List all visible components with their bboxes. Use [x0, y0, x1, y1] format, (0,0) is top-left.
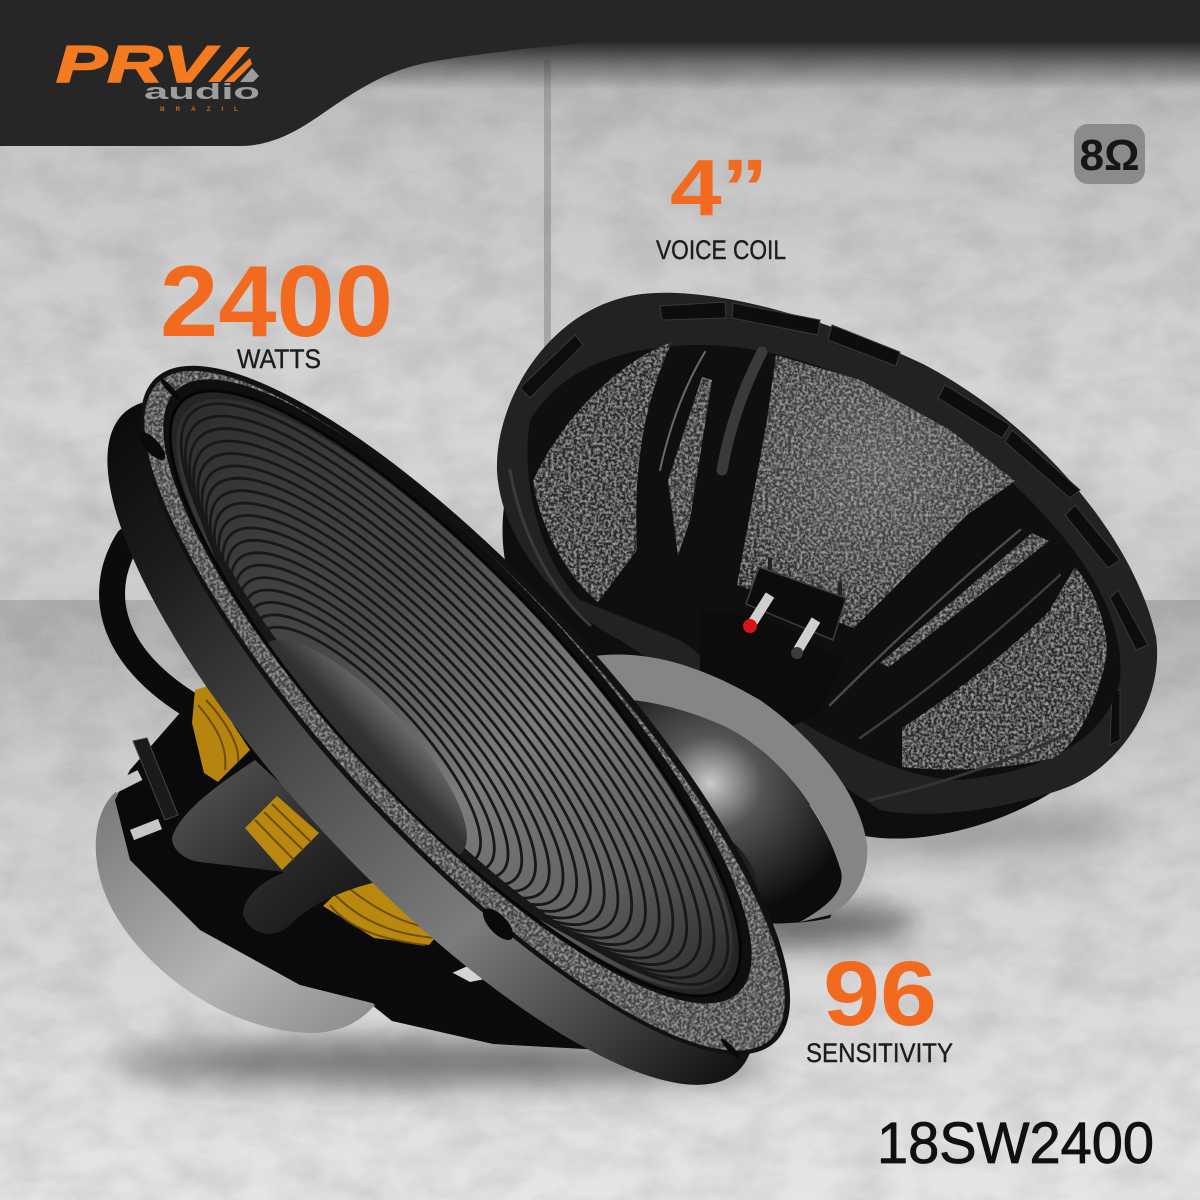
- front speaker terminal: [114, 738, 178, 835]
- rear speaker magnet dome: [600, 698, 845, 924]
- spec: voice coil: 4”: [670, 143, 768, 232]
- front speaker lower band: [323, 900, 640, 1052]
- rear speaker magnet ring: [577, 654, 867, 922]
- front speaker: [96, 366, 790, 1085]
- front speaker band gap: [440, 953, 490, 982]
- rim side band: [22, 318, 840, 1167]
- rear cone panel: between arms: [668, 377, 712, 556]
- logo: PRV audio Brazil: BRAZIL: [160, 106, 238, 113]
- spec: voice coil: VOICE COIL: [656, 235, 786, 265]
- spec: sensitivity: 96: [823, 943, 937, 1045]
- rear speaker: [497, 293, 1157, 924]
- rear cone panel: window: [880, 533, 1049, 667]
- floor shadows: [110, 804, 1130, 1084]
- dark top banner: [0, 0, 1200, 146]
- rim bolt notches: [63, 377, 772, 1123]
- front speaker rim and cone (rotated frame): [107, 366, 790, 1085]
- copper coil window: [245, 796, 319, 870]
- spec: watts: 2400: [160, 246, 393, 358]
- impedance badge: 8Ω: [1080, 131, 1140, 180]
- copper coil top: [192, 686, 250, 782]
- front speaker basket arc: [112, 540, 190, 705]
- front speaker spoke loop: [172, 760, 385, 934]
- spec: voice coil: [656, 143, 786, 265]
- front speaker rear body: [115, 690, 470, 1005]
- cone with ridges: [176, 399, 732, 989]
- surround inner ring: [100, 324, 811, 1063]
- front speaker magnet ring: [96, 790, 375, 1033]
- rear speaker rim vents: [520, 302, 1148, 745]
- rim dark edge: [58, 287, 873, 1134]
- copper coil bottom: [323, 870, 443, 945]
- rear cone panel: centre: [737, 355, 1015, 628]
- rear speaker central block: [700, 610, 845, 735]
- logo: PRV audio Brazil: audio: [144, 79, 260, 104]
- logo: PRV audio Brazil: [56, 36, 260, 113]
- rear speaker back plate: [673, 816, 771, 920]
- model name: 18SW2400: [877, 1111, 1154, 1176]
- spec: sensitivity: [806, 943, 953, 1068]
- spec: watts: WATTS: [237, 344, 321, 374]
- rear cone panel: left: [533, 342, 672, 602]
- logo: PRV audio Brazil: PRV: [56, 36, 220, 94]
- rear speaker rim: [497, 293, 1157, 814]
- impedance badge: [1074, 124, 1145, 184]
- rear speaker inner cavity: [527, 345, 1120, 780]
- black surround: [89, 309, 825, 1074]
- rear speaker lower frame: [503, 420, 1075, 839]
- rear speaker spoke highlights: [510, 352, 1065, 800]
- spec: sensitivity: SENSITIVITY: [806, 1038, 953, 1068]
- gasket: [65, 295, 864, 1126]
- rear cone panel: right: [902, 567, 1107, 770]
- rear speaker terminal: [743, 558, 846, 659]
